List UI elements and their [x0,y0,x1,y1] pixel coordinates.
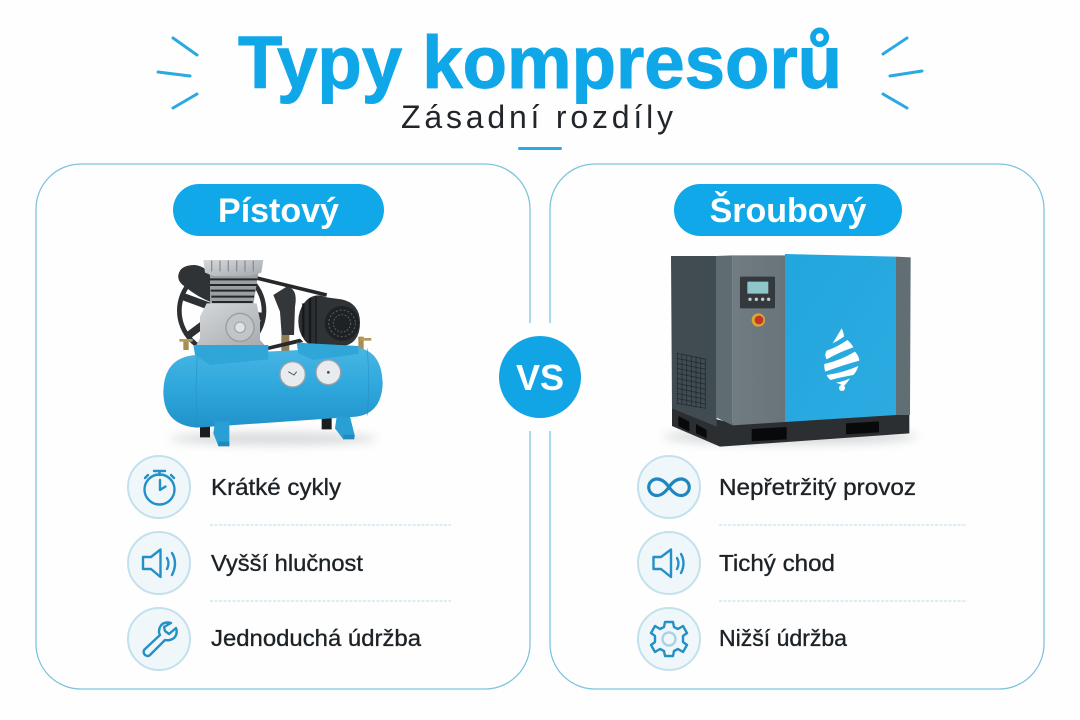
feature: Nepřetržitý provoz: Nepřetržitý provoz [719,474,916,500]
feature: Nižší údržba [638,608,848,670]
feature: Krátké cykly [128,456,341,518]
icon: infinity [638,456,700,518]
illustration: screw compressor [663,254,917,447]
badge: Šroubový [674,184,902,236]
badge: Pístový: Pístový [218,192,339,230]
icon: loudspeaker quiet [638,532,700,594]
badge: Pístový [173,184,384,236]
subtitle: Zásadní rozdíly [401,99,675,135]
icon: stopwatch [128,456,190,518]
VS badge: VS [516,357,564,398]
feature: Jednoduchá údržba [128,608,422,670]
badge: Šroubový: Šroubový [710,191,866,230]
decorative rays left [158,38,197,108]
feature: Vyšší hlučnost [128,532,363,594]
icon: wrench [128,608,190,670]
divider [719,524,967,526]
feature: Tichý chod: Tichý chod [719,550,835,576]
feature: Krátké cykly: Krátké cykly [211,474,341,500]
icon: gear [638,608,700,670]
feature: Tichý chod [638,532,835,594]
divider [210,524,451,526]
subtitle underline [518,147,562,150]
feature: Nepřetržitý provoz [638,456,916,518]
feature: Vyšší hlučnost: Vyšší hlučnost [211,550,363,576]
feature: Nižší údržba: Nižší údržba [719,625,848,651]
panel: Pístový [36,164,530,689]
panel: Šroubový [550,164,1044,689]
title: Typy kompresorů [238,21,842,104]
divider [210,600,451,602]
illustration: piston compressor [163,260,383,446]
decorative rays right [883,38,922,108]
feature: Jednoduchá údržba: Jednoduchá údržba [211,625,422,651]
VS badge [499,336,581,418]
divider [719,600,967,602]
panel outline left [36,164,530,689]
icon: loudspeaker [128,532,190,594]
icon: drop logo [824,328,859,391]
panel outline right [550,164,1044,689]
